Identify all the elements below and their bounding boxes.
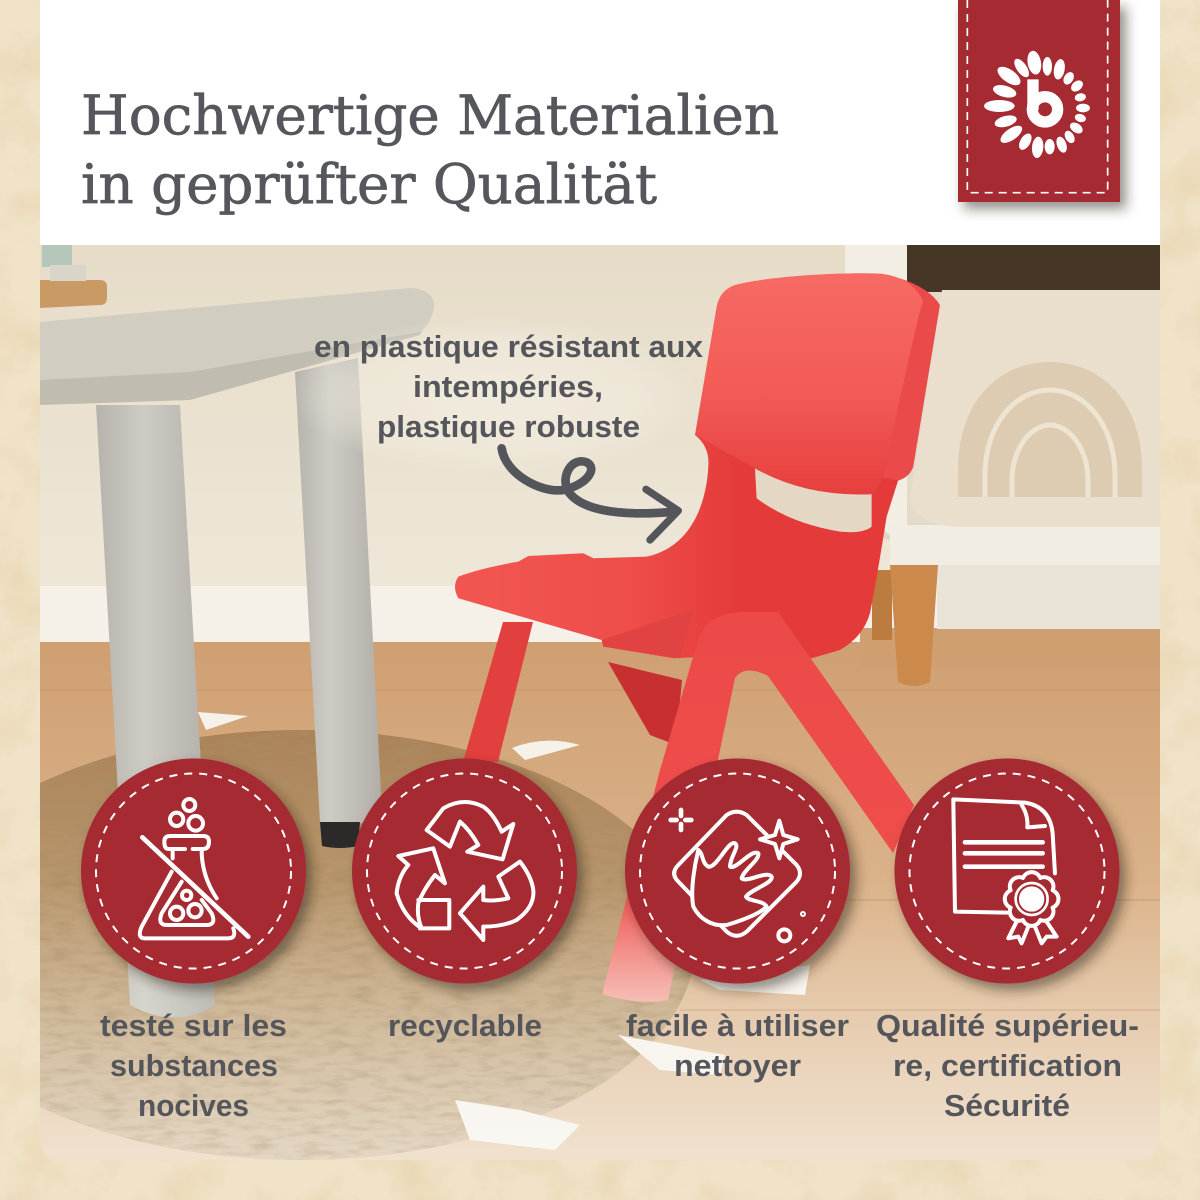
logo flag <box>958 0 1120 202</box>
arrow to chair <box>502 448 678 540</box>
rear leg <box>463 622 533 762</box>
lower seat shell <box>455 435 898 658</box>
logo letter b <box>1032 79 1058 122</box>
backrest side <box>877 278 940 481</box>
photo: room scene with chair <box>0 245 1160 1162</box>
label: recyclable: recyclable <box>388 1008 542 1043</box>
badge: easy to clean <box>625 758 850 984</box>
badge: recyclable <box>352 758 577 984</box>
label: tested for harmful substances: nocives <box>138 1088 249 1123</box>
callout text: en plastique résistant aux <box>314 329 704 364</box>
label: easy to clean: facile à utiliser <box>626 1008 849 1043</box>
callout text <box>314 329 704 444</box>
table top <box>40 288 434 405</box>
header panel <box>40 0 1160 246</box>
label: superior quality <box>876 1008 1139 1123</box>
title: in geprüfter Qualität <box>81 153 657 216</box>
backrest front <box>695 273 923 494</box>
fabric basket with rainbow <box>942 290 1160 527</box>
callout text: plastique robuste <box>377 409 640 444</box>
backrest opening <box>755 468 872 532</box>
table leg: back <box>295 358 382 827</box>
label: tested for harmful substances <box>100 1008 287 1123</box>
middle leg <box>608 662 682 745</box>
toy on table <box>40 245 107 308</box>
wall <box>40 245 937 586</box>
table leg: front <box>96 405 215 1018</box>
red chair <box>455 273 940 1002</box>
front legs <box>602 612 914 1002</box>
logo flower <box>984 50 1090 158</box>
icon: recycling arrows <box>397 802 533 940</box>
label: superior quality: re, certification <box>893 1048 1122 1083</box>
callout text: intempéries, <box>413 369 603 404</box>
label: superior quality: Sécurité <box>944 1088 1070 1123</box>
label: easy to clean: nettoyer <box>674 1048 801 1083</box>
bottom fade <box>40 918 1160 1160</box>
baseboard <box>40 586 940 646</box>
wooden floor <box>40 628 1160 1162</box>
badge: certified quality <box>894 758 1120 984</box>
label: tested for harmful substances: testé sur les <box>100 1008 287 1043</box>
label: easy to clean <box>626 1008 849 1083</box>
text glow <box>312 332 647 450</box>
chair body <box>455 273 940 658</box>
title <box>81 84 779 216</box>
label: superior quality: Qualité supérieu- <box>876 1008 1139 1043</box>
title: Hochwertige Materialien <box>81 84 779 147</box>
badge: no harmful substances <box>81 758 306 984</box>
icon: wiping hand <box>671 810 804 941</box>
icon: crossed flask <box>140 799 248 938</box>
seat underside shade <box>602 610 693 658</box>
tassels <box>198 712 810 1150</box>
shelf unit <box>845 245 1160 686</box>
jute rug <box>0 730 695 1160</box>
label: tested for harmful substances: substances <box>110 1048 278 1083</box>
leg foot <box>320 822 360 848</box>
icon: certificate with rosette <box>953 799 1058 943</box>
